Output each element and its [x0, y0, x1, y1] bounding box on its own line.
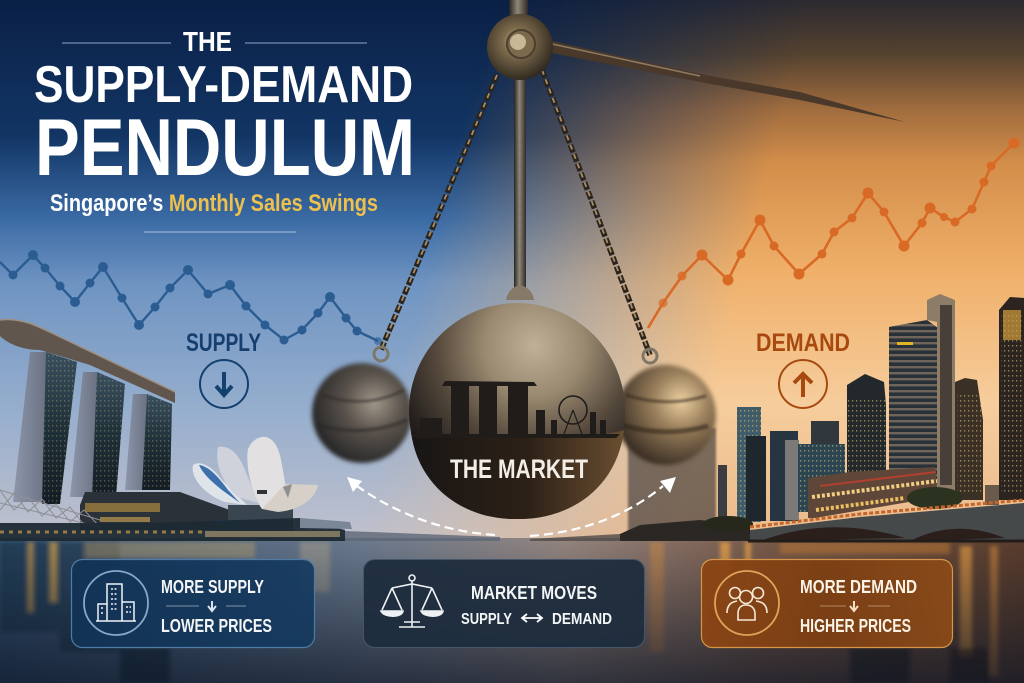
harbour water [0, 538, 1024, 683]
higher prices text: HIGHER PRICES [800, 616, 911, 636]
market moves text: MARKET MOVES [471, 583, 597, 603]
ArtScience Museum [193, 437, 318, 531]
icon: balance scales [381, 575, 443, 627]
left skyline: Marina Bay Sands [0, 319, 235, 530]
ball label: THE MARKET [450, 454, 588, 484]
ball skyline etching [411, 381, 620, 438]
subtitle: Singapore’s Monthly Sales Swings [50, 190, 378, 217]
heading: SUPPLY-DEMAND: SUPPLY-DEMAND [34, 56, 413, 114]
supply label [186, 329, 261, 408]
supply arrow divider [166, 601, 246, 611]
pendulum [312, 0, 905, 519]
panel: more demand [702, 560, 952, 648]
right skyline [628, 294, 1024, 533]
right shoreline and bridge [530, 500, 1024, 541]
heading: PENDULUM: PENDULUM [35, 103, 415, 193]
left chain [381, 75, 497, 350]
supply trend line [0, 250, 382, 345]
supply heading: SUPPLY [186, 329, 261, 357]
supply demand text: SUPPLY [461, 611, 512, 628]
right swinging ball [616, 349, 716, 465]
background sky [0, 0, 1024, 545]
heading: THE: THE [183, 26, 232, 57]
demand arrow divider [820, 601, 890, 611]
centre rod [514, 70, 526, 292]
pivot hub [487, 14, 553, 80]
demand text: DEMAND [552, 611, 612, 628]
supply text: MORE SUPPLY [161, 577, 264, 597]
icon: demand up arrow [779, 360, 827, 408]
left helix bridge [0, 490, 100, 527]
swing arrow: left [347, 477, 495, 535]
panel: more supply [72, 560, 314, 648]
right chain [542, 70, 650, 355]
horizontal beam [552, 41, 905, 122]
main market ball [409, 303, 625, 519]
panel: market moves [364, 560, 644, 648]
subtitle rule [144, 231, 296, 233]
top rod [509, 0, 528, 18]
left shoreline [0, 518, 500, 541]
demand label [756, 329, 850, 408]
demand text: MORE DEMAND [800, 577, 917, 597]
demand heading: DEMAND [756, 329, 850, 357]
lower prices text: LOWER PRICES [161, 616, 272, 636]
title rule: right [245, 42, 367, 44]
title rule: left [62, 42, 171, 44]
Fullerton building [808, 467, 963, 518]
left swinging ball [312, 347, 412, 463]
demand trend line [648, 138, 1020, 328]
icon: people [715, 571, 779, 635]
icon: buildings [84, 571, 148, 635]
double arrow [522, 614, 542, 622]
collar [506, 285, 534, 300]
icon: supply down arrow [200, 360, 248, 408]
swing arrow: right [530, 477, 676, 536]
title block [34, 26, 415, 232]
